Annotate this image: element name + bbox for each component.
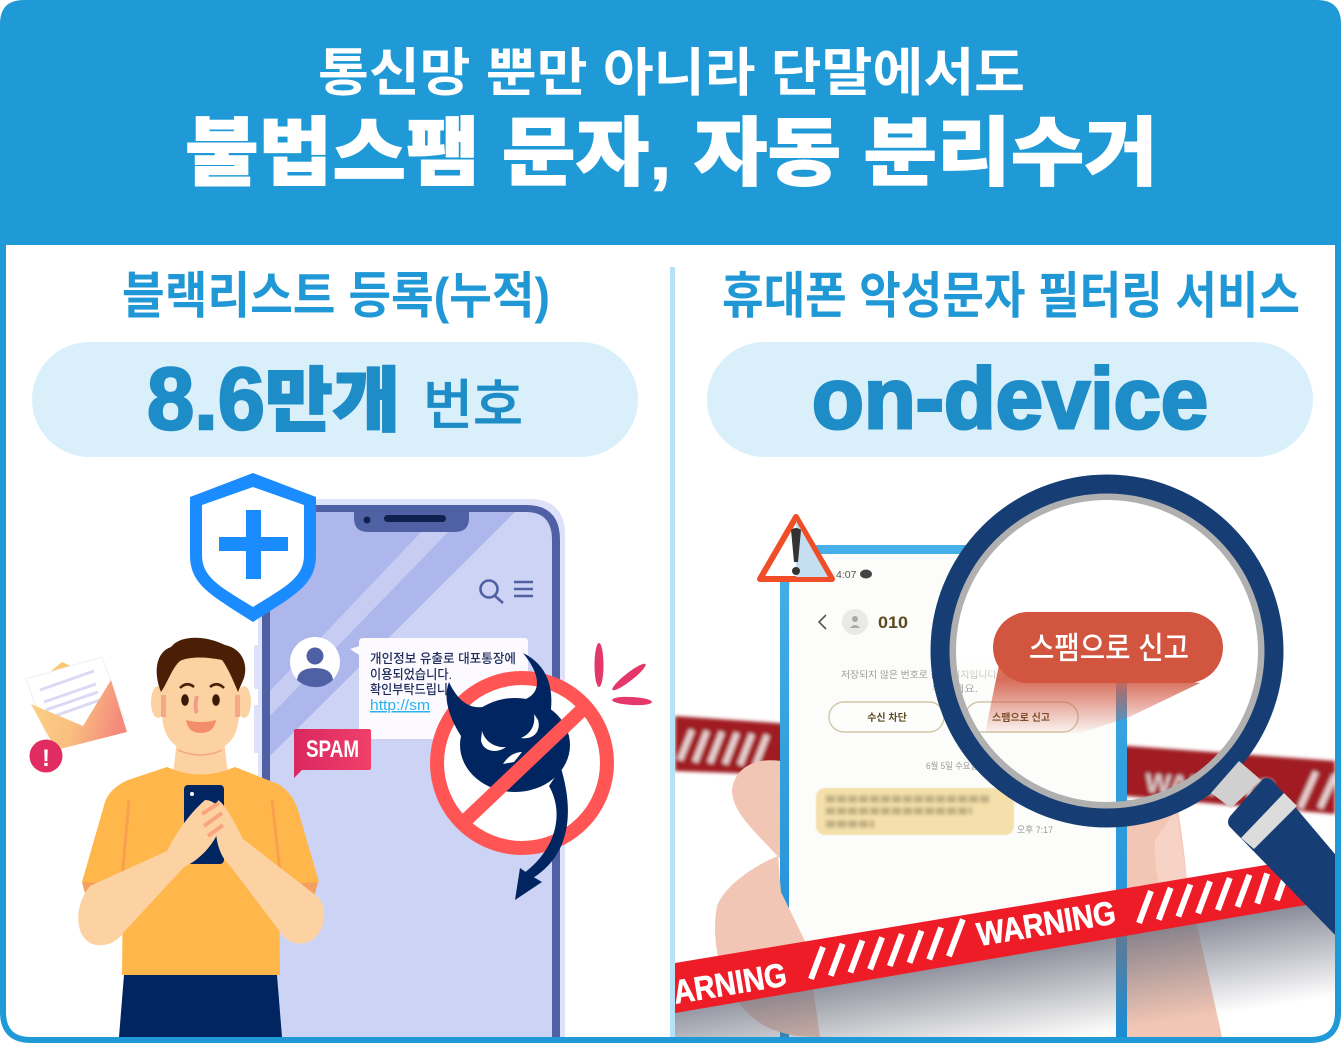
- mouth: [186, 720, 216, 733]
- panel: on-device: [645, 268, 1340, 1037]
- block button: 수신 차단: [867, 711, 907, 724]
- icon: envelope with alert: !: [42, 745, 50, 772]
- icon: security shield: [190, 473, 316, 622]
- ears: [151, 686, 165, 718]
- message bubble: 확인부탁드립니: [370, 682, 448, 697]
- brows and eyes: [180, 684, 224, 688]
- header band: [0, 0, 1341, 245]
- status bar: 4:07: [836, 569, 857, 581]
- message bubble: http://sm: [370, 697, 430, 714]
- blurred message: [816, 788, 1014, 835]
- date label: 6월 5일 수요일: [926, 760, 978, 771]
- illustration: phone with spam message: [254, 499, 565, 1037]
- title line 1: 통신망 뿐만 아니라 단말에서도: [318, 45, 1025, 103]
- SPAM tag: SPAM: [306, 736, 359, 763]
- blurred back tape: [675, 716, 1335, 814]
- status bar: [836, 570, 872, 578]
- phone notch: [354, 512, 469, 532]
- right hand: [1125, 800, 1222, 1037]
- side buttons: [254, 645, 258, 689]
- callout cone: [985, 660, 1200, 733]
- lens wash: [958, 545, 1127, 690]
- trousers: [119, 975, 282, 1037]
- message bubble: 이용되었습니다.: [370, 667, 452, 682]
- face: [162, 655, 239, 752]
- outer frame: [3, 245, 1338, 1040]
- block button: [829, 702, 944, 732]
- held phone: [184, 785, 224, 864]
- icon: prohibited devil: [437, 653, 607, 900]
- magnifier: [940, 484, 1274, 818]
- heading: blacklist: 블랙리스트 등록(누적): [122, 268, 550, 324]
- stat pill: 8.6만개 번호: 8.6: [147, 349, 265, 448]
- stat pill: on-device: [707, 342, 1313, 457]
- SPAM tag: [294, 729, 371, 778]
- page background: [6, 245, 1335, 1037]
- lens rim: [952, 496, 1262, 806]
- stat pill: on-device: on-device: [812, 351, 1208, 447]
- stat pill: 8.6만개 번호: [32, 342, 638, 457]
- icon: sender avatar: [290, 637, 340, 687]
- icon: red alert sparks: [594, 643, 652, 706]
- sleeve undersides: [82, 882, 100, 905]
- warning tape: WARNING: [645, 956, 789, 1015]
- illustration: warning scene: 위험해요.: [932, 683, 978, 695]
- time label: 오후 7:17: [1017, 825, 1053, 836]
- magnifier handle: [1211, 761, 1340, 940]
- report button: [965, 702, 1078, 732]
- warning tape shadow: [675, 896, 1335, 1037]
- report callout: 스팸으로 신고: [1029, 631, 1189, 666]
- stat pill: 8.6만개 번호: 번호: [423, 376, 523, 436]
- stat pill: 8.6만개 번호: 만개: [265, 362, 400, 440]
- icon: envelope with alert: [26, 657, 127, 772]
- title line 2: 불법스팸 문자, 자동 분리수거: [185, 111, 1158, 195]
- warning tape: WARNING: [974, 894, 1118, 953]
- notice text: 저장되지 않은 번호로 온 메시지입니다. 스: [841, 669, 1011, 681]
- message bubble: [350, 638, 528, 739]
- hair: [157, 638, 245, 692]
- nose: [196, 696, 197, 713]
- icon: search and menu: [480, 580, 533, 603]
- report callout: [993, 612, 1223, 683]
- left palm in front of phone: [715, 856, 820, 1037]
- phone body: [780, 545, 1127, 1037]
- warning tape: [645, 864, 1312, 1015]
- neck: [173, 740, 228, 775]
- panel: blacklist: [26, 268, 652, 1037]
- blurred back tape: WARNING: [1145, 768, 1277, 805]
- arms and hands: [78, 800, 222, 945]
- status bar: 87%: [1062, 569, 1086, 581]
- t-shirt: [82, 767, 319, 975]
- conversation header: 010: [878, 613, 908, 632]
- illustration: man holding phone: [78, 638, 324, 1037]
- message bubble: 개인정보 유출로 대포통장에: [370, 651, 516, 666]
- icon: warning triangle: [760, 517, 832, 579]
- illustration: warning scene: [645, 484, 1340, 1037]
- left fingers: [732, 760, 780, 858]
- report button: 스팸으로 신고: [992, 711, 1050, 724]
- divider: [670, 267, 675, 1037]
- conversation header: [819, 609, 908, 635]
